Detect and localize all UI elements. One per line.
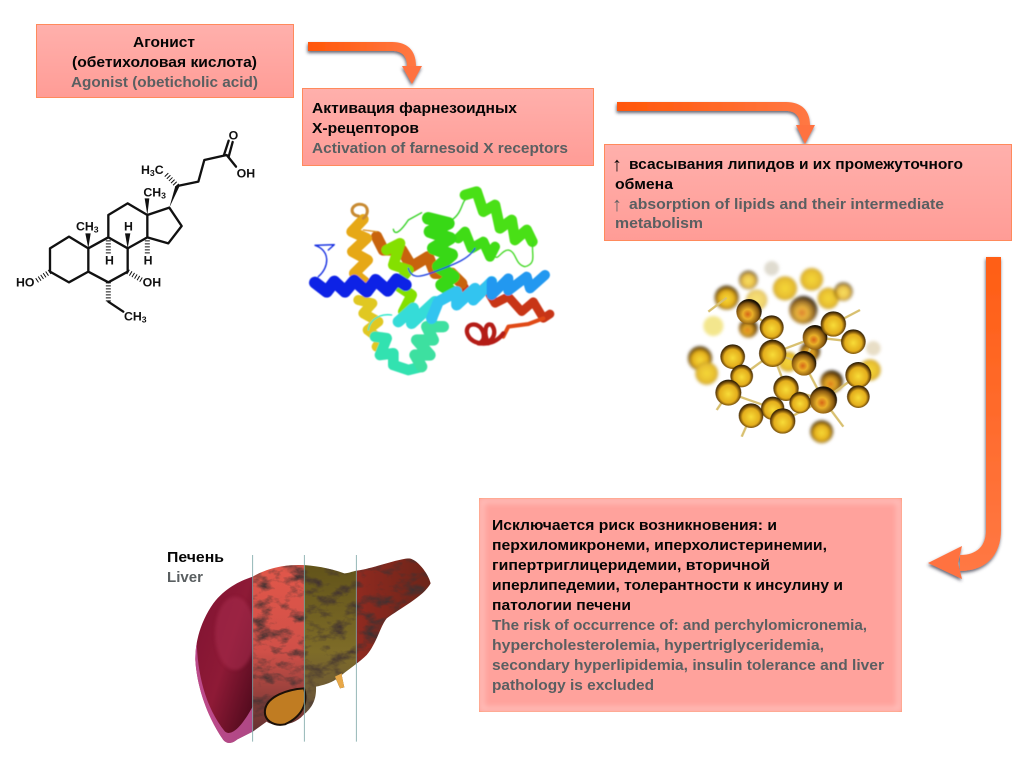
chemical structure: obeticholic acid: H bbox=[124, 220, 133, 234]
icon: up arrow russian: ↑ bbox=[612, 154, 622, 176]
chemical structure: obeticholic acid: 3 bbox=[150, 168, 155, 178]
liver body with staged sections bbox=[190, 553, 436, 750]
section lines bbox=[253, 555, 356, 742]
text: risk russian: перхиломикронеми, иперхолистеринемии, bbox=[492, 537, 827, 554]
protein ribbon: farnesoid X receptor bbox=[315, 192, 550, 370]
chemical structure: obeticholic acid bbox=[16, 128, 255, 325]
chemical structure: obeticholic acid: CH bbox=[124, 310, 142, 324]
text: risk english: secondary hyperlipidemia, insulin tolerance and liver bbox=[492, 657, 884, 674]
text: risk english bbox=[492, 617, 884, 694]
chemical structure: obeticholic acid: H bbox=[105, 253, 114, 267]
text: obeticholic acid russian: (обетихоловая кислота) bbox=[72, 54, 257, 71]
chemical structure: obeticholic acid: HO bbox=[16, 276, 35, 290]
icon: up arrow english: ↑ bbox=[612, 194, 622, 216]
label: liver russian: Печень bbox=[167, 549, 224, 566]
illustration: liver bbox=[190, 553, 436, 750]
text: receptors russian: Х-рецепторов bbox=[312, 120, 419, 137]
text: risk russian: Исключается риск возникновения: и bbox=[492, 517, 777, 534]
blurred background spheres bbox=[688, 261, 881, 443]
text: metabolism english: metabolism bbox=[615, 215, 703, 232]
text: risk english: The risk of occurrence of: and perchylomicronemia, bbox=[492, 617, 867, 634]
chemical structure: obeticholic acid: H bbox=[141, 163, 150, 177]
chemical structure: obeticholic acid: 3 bbox=[94, 225, 99, 235]
chemical structure: obeticholic acid: H bbox=[144, 253, 153, 267]
text: risk english: pathology is excluded bbox=[492, 677, 654, 694]
panel: agonist bbox=[36, 24, 294, 98]
heading: agonist russian: Агонист bbox=[133, 34, 195, 51]
arrow: agonist to receptor activation bbox=[308, 42, 422, 84]
text: risk english: hypercholesterolemia, hypertriglyceridemia, bbox=[492, 637, 824, 654]
chemical structure: obeticholic acid: OH bbox=[143, 276, 161, 290]
sticks bbox=[708, 298, 860, 437]
arrow: receptor activation to lipid absorption bbox=[617, 102, 815, 144]
text: risk russian: патологии печени bbox=[492, 597, 631, 614]
text: agonist english: Agonist (obeticholic acid) bbox=[71, 74, 258, 91]
label: liver english: Liver bbox=[167, 569, 203, 586]
panel: lipid absorption bbox=[604, 144, 1012, 240]
chemical structure: obeticholic acid: O bbox=[229, 128, 239, 142]
panel: farnesoid X receptor activation bbox=[302, 88, 594, 166]
chemical structure: obeticholic acid: 3 bbox=[161, 191, 166, 201]
text: activation english: Activation of farnesoid X receptors bbox=[312, 140, 568, 157]
text: risk russian: гипертриглицеридемии, вторичной bbox=[492, 557, 770, 574]
illustration: lipid molecules bbox=[688, 261, 881, 443]
chemical structure: obeticholic acid: CH bbox=[143, 186, 161, 200]
text: absorption english: absorption of lipids and their intermediate bbox=[629, 196, 944, 213]
chemical structure: obeticholic acid: CH bbox=[76, 220, 94, 234]
foreground spheres bbox=[715, 299, 871, 434]
chemical structure: obeticholic acid: C bbox=[155, 163, 164, 177]
arrow: lipid absorption to excluded risk bbox=[928, 257, 1001, 579]
text: metabolism russian: обмена bbox=[615, 176, 674, 193]
gallbladder bbox=[265, 688, 305, 725]
text: activation russian: Активация фарнезоидных bbox=[312, 100, 518, 117]
text: risk russian bbox=[492, 517, 843, 614]
chemical structure: obeticholic acid: OH bbox=[237, 166, 255, 180]
panel: excluded risk bbox=[480, 498, 902, 712]
chemical structure: obeticholic acid: 3 bbox=[142, 315, 147, 325]
text: absorption russian: всасывания липидов и их промежуточного bbox=[629, 156, 963, 173]
text: risk russian: иперлипедемии, толерантности к инсулину и bbox=[492, 577, 843, 594]
